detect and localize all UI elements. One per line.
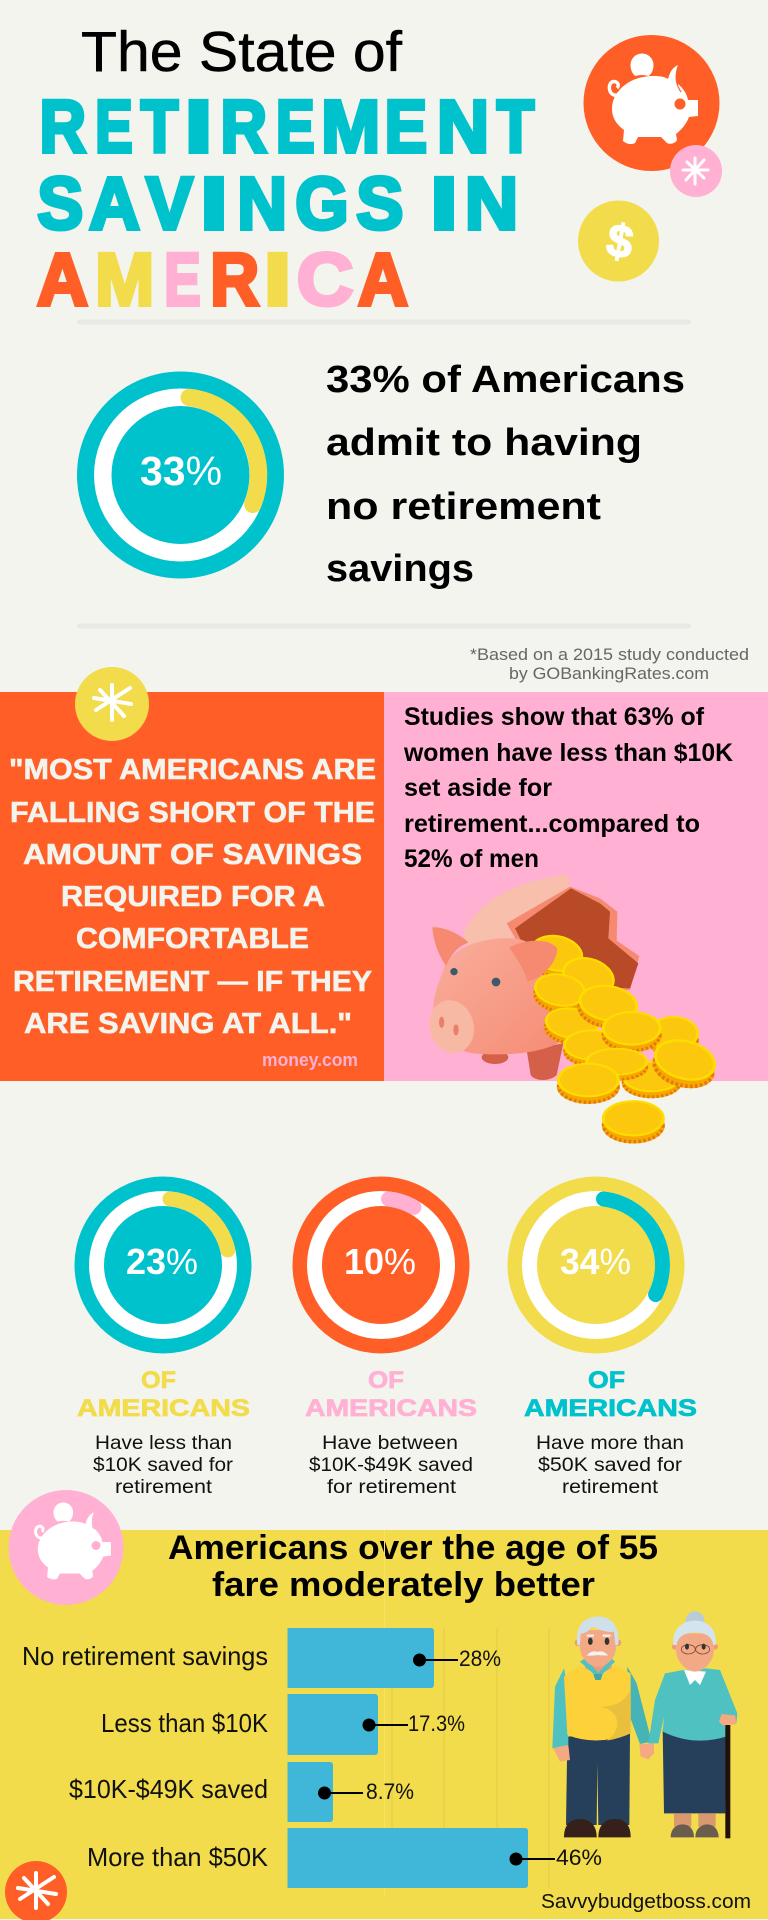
bar: more than $50K 46% (87, 1828, 602, 1888)
label description: retirement (562, 1477, 659, 1498)
gender gap text (403, 703, 733, 873)
label description: $10K-$49K saved (309, 1455, 473, 1476)
label description (93, 1433, 234, 1498)
quote source: money.com (262, 1050, 358, 1070)
label description: Have more than (536, 1433, 684, 1454)
title line: SAVINGS IN: G (295, 162, 349, 245)
icon: yellow dollar badge (578, 200, 659, 282)
woman (648, 1611, 737, 1838)
gender gap text: Studies show that 63% of (404, 703, 705, 731)
title line: SAVINGS IN: N (237, 162, 287, 245)
quote text: FALLING SHORT OF THE (10, 797, 375, 829)
footnote: by GOBankingRates.com (509, 664, 709, 683)
panel: gender gap (384, 692, 768, 1081)
donut chart: 10% (292, 1176, 470, 1354)
title line: RETIREMENT: E (385, 85, 427, 168)
icon: yellow dollar badge: $ (603, 213, 637, 269)
label description (536, 1433, 684, 1498)
stat text: 33% of Americans: no retirement (326, 486, 601, 528)
gender gap text: set aside for (404, 774, 552, 802)
label heading (305, 1367, 477, 1422)
title line: RETIREMENT: E (276, 85, 315, 168)
label description: $10K saved for (93, 1455, 234, 1476)
donut chart: 10%: 10% (344, 1241, 416, 1282)
donut chart: 23% (74, 1176, 252, 1354)
bar: $10K-$49K saved 8.7%: $10K-$49K saved (69, 1774, 268, 1804)
label column: more than $50K (524, 1367, 697, 1498)
label heading: OF (588, 1367, 625, 1394)
label heading: AMERICANS (77, 1395, 250, 1422)
title line: The State of: The State of (81, 20, 402, 84)
bar: no retirement savings 28%: No retirement savings (22, 1641, 268, 1671)
quote text: ARE SAVING AT ALL." (24, 1008, 352, 1040)
label description: Have between (322, 1433, 458, 1454)
title line: SAVINGS IN: S (356, 162, 403, 245)
footnote (470, 645, 749, 683)
icon: pink asterisk badge (670, 145, 722, 197)
title line: RETIREMENT: E (95, 85, 133, 168)
title line: AMERICA: E (164, 238, 201, 321)
label description: Have less than (95, 1433, 232, 1454)
donut chart: 23%: 23% (126, 1241, 198, 1282)
title line: SAVINGS IN: I (430, 162, 458, 245)
icon: yellow asterisk badge (75, 667, 149, 741)
panel heading: Americans over the age of 55 (168, 1529, 658, 1567)
bar: $10K-$49K saved 8.7% (69, 1762, 414, 1822)
label heading (77, 1367, 250, 1422)
stat text: 33% of Americans: savings (326, 548, 474, 590)
panel heading: fare moderately better (212, 1566, 595, 1604)
quote text: RETIREMENT — IF THEY (13, 966, 372, 998)
title line: RETIREMENT: T (141, 85, 178, 168)
title line: RETIREMENT: T (497, 85, 534, 168)
title line: AMERICA: I (264, 238, 292, 321)
label heading: OF (368, 1367, 404, 1394)
illustration: broken piggy bank with coins (424, 875, 720, 1144)
source credit: Savvybudgetboss.com (541, 1891, 751, 1913)
title line: AMERICA: A (358, 238, 408, 321)
gender gap text: retirement...compared to (404, 810, 700, 838)
title line: RETIREMENT: N (437, 85, 489, 168)
bar chart (22, 1628, 602, 1888)
bar: less than $10K 17.3%: 17.3% (408, 1711, 465, 1736)
title line: SAVINGS IN: I (200, 162, 228, 245)
bar: less than $10K 17.3% (101, 1694, 465, 1755)
label heading: AMERICANS (305, 1395, 477, 1422)
gender gap text: women have less than $10K (403, 739, 733, 767)
man (552, 1617, 654, 1837)
label heading: AMERICANS (524, 1395, 697, 1422)
title (37, 20, 534, 321)
stat text: 33% of Americans: admit to having (326, 422, 642, 464)
quote text: AMOUNT OF SAVINGS (23, 839, 362, 871)
label column: $10K-$49K (305, 1367, 477, 1498)
panel: over 55 (0, 1529, 768, 1919)
donut chart: 33% (77, 372, 284, 578)
label description: for retirement (327, 1477, 457, 1498)
title line: RETIREMENT: R (40, 85, 86, 168)
title line: RETIREMENT: R (220, 85, 267, 168)
title line: AMERICA: C (297, 238, 353, 321)
bar: more than $50K 46%: 46% (556, 1845, 602, 1870)
title line: SAVINGS IN: A (89, 162, 140, 245)
quote text: "MOST AMERICANS ARE (9, 754, 376, 786)
title line: AMERICA: A (37, 238, 88, 321)
donut chart: 34%: 34% (560, 1241, 631, 1282)
panel heading (168, 1529, 658, 1604)
title line: SAVINGS IN: N (465, 162, 518, 245)
stat text: 33% of Americans: 33% of Americans (326, 359, 685, 401)
label column: less than $10K (77, 1367, 250, 1498)
footnote: *Based on a 2015 study conducted (470, 645, 749, 664)
label description (309, 1433, 473, 1498)
icon: orange asterisk badge (5, 1861, 67, 1920)
title line: AMERICA: R (210, 238, 259, 321)
panel: quote (0, 692, 384, 1081)
title line: RETIREMENT: I (184, 85, 212, 168)
bar: no retirement savings 28%: 28% (459, 1646, 501, 1671)
title line: RETIREMENT: M (321, 85, 380, 168)
illustration: elderly couple (552, 1611, 737, 1838)
icon: piggy bank on pink circle (8, 1490, 124, 1605)
label heading: OF (141, 1367, 176, 1394)
label description: $50K saved for (538, 1455, 683, 1476)
bar: more than $50K 46%: More than $50K (87, 1842, 269, 1872)
donut chart: 34% (508, 1176, 684, 1354)
stat text: 33% of Americans (326, 359, 685, 590)
title line: AMERICA: M (95, 238, 154, 321)
donut chart: 33%: 33% (140, 448, 222, 494)
quote text: REQUIRED FOR A (61, 881, 325, 913)
gender gap text: 52% of men (404, 845, 539, 873)
quote text: COMFORTABLE (76, 923, 309, 955)
bar: less than $10K 17.3%: Less than $10K (101, 1708, 269, 1738)
label heading (524, 1367, 697, 1422)
title line: SAVINGS IN: S (37, 162, 83, 245)
label description: retirement (115, 1477, 213, 1498)
title line: SAVINGS IN: V (146, 162, 193, 245)
bar: $10K-$49K saved 8.7%: 8.7% (366, 1779, 414, 1804)
bar: no retirement savings 28% (22, 1628, 501, 1688)
quote text (9, 754, 376, 1040)
icon: piggy bank on orange circle (584, 35, 720, 171)
